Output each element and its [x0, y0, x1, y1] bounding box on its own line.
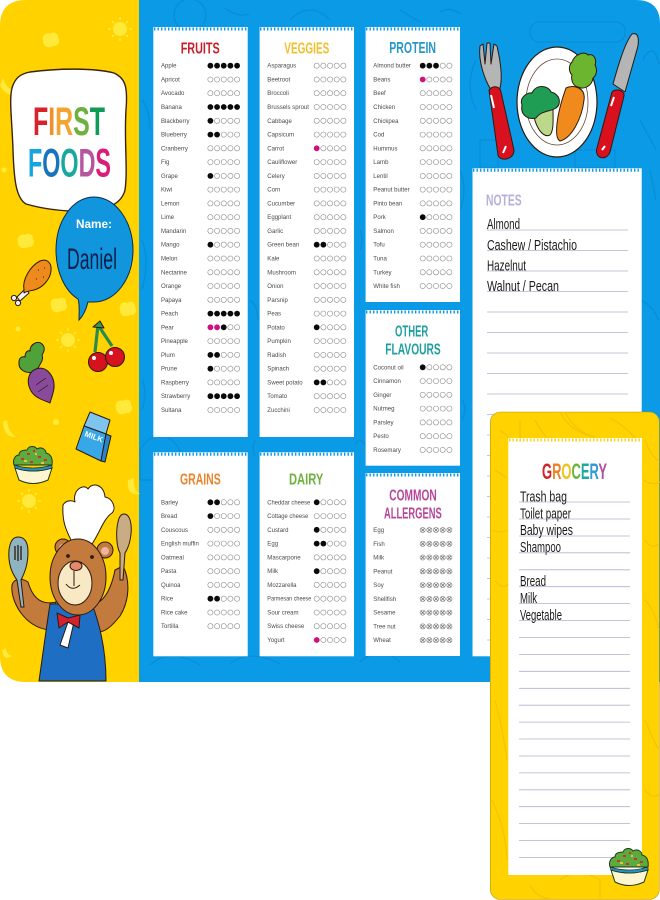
- list: grains: Tortilla: [161, 624, 179, 630]
- list: veggies: Zucchini: [267, 408, 290, 414]
- heading: common allergens: ALLERGENS: [384, 505, 442, 522]
- list: fruits: Fig: [161, 160, 169, 166]
- illustration: chef bear: [9, 485, 131, 681]
- list: protein: Pork: [373, 215, 387, 221]
- list: fruits: Blueberry: [161, 133, 188, 139]
- heading: fruits: FRUITS: [181, 40, 220, 57]
- list: veggies: Cauliflower: [267, 160, 297, 166]
- list: fruits: Mandarin: [161, 229, 186, 235]
- panel: grocery pad: [490, 412, 660, 900]
- panel: common allergens card: [366, 473, 460, 656]
- list: fruits: Cranberry: [161, 146, 189, 152]
- list: protein: Salmon: [373, 229, 394, 235]
- list: veggies: Celery: [267, 174, 286, 180]
- list: protein: Lamb: [373, 160, 389, 166]
- list: veggies: Carrot: [267, 146, 284, 152]
- bear head: [50, 539, 106, 615]
- list: fruits: Apple: [161, 64, 177, 70]
- list: fruits: Apricot: [161, 77, 180, 83]
- grocery handwriting: Baby wipes: [520, 522, 573, 539]
- heading: dairy: DAIRY: [289, 471, 324, 488]
- list: veggies: Onion: [267, 284, 283, 290]
- panel: grains card: [153, 452, 248, 656]
- list: protein: Almond butter: [373, 64, 411, 70]
- list: common allergens: Wheat: [373, 638, 391, 644]
- list: fruits: Pear: [161, 325, 174, 331]
- list: veggies: [267, 63, 346, 414]
- notes handwriting: Walnut / Pecan: [487, 278, 559, 295]
- list: veggies: Capsicum: [267, 133, 294, 139]
- list: dairy: Parmesan cheese: [267, 597, 312, 603]
- list: grains: Rice cake: [161, 610, 188, 616]
- list: veggies: Asparagus: [267, 64, 296, 70]
- illustration: knife: [597, 34, 638, 158]
- list: fruits: Grape: [161, 174, 178, 180]
- list: other flavours: Coconut oil: [373, 365, 404, 371]
- panel: yellow sidebar: [0, 0, 139, 682]
- list: grains: Rice: [161, 597, 174, 603]
- panel: notes sheet: [472, 168, 642, 656]
- list: protein: Peanut butter: [373, 188, 410, 194]
- list: other flavours: Nutmeg: [373, 407, 394, 413]
- list: fruits: Peach: [161, 312, 178, 318]
- list: protein: Turkey: [373, 270, 393, 276]
- list: veggies: Corn: [267, 188, 280, 194]
- list: common allergens: Shellfish: [373, 597, 396, 603]
- list: grains: Oatmeal: [161, 555, 184, 561]
- grocery handwriting: Trash bag: [520, 489, 567, 506]
- notes handwriting: Almond: [487, 216, 520, 233]
- list: fruits: Blackberry: [161, 119, 191, 125]
- chef hat: [63, 485, 114, 544]
- list: other flavours: [373, 364, 452, 454]
- notes handwriting: Hazelnut: [487, 258, 527, 274]
- heading: other flavours: OTHER: [395, 324, 429, 341]
- title: first: FIRST: [33, 100, 105, 144]
- list: fruits: Kiwi: [161, 188, 172, 194]
- icon: chicken drumstick: [11, 260, 51, 306]
- list: common allergens: Egg: [373, 528, 384, 534]
- title: foods: FOODS: [28, 142, 111, 186]
- list: dairy: Egg: [267, 542, 278, 548]
- list: grains: Pasta: [161, 569, 177, 575]
- list: fruits: Papaya: [161, 298, 182, 304]
- list: dairy: Sour cream: [267, 610, 299, 616]
- list: grains: Couscous: [161, 528, 188, 534]
- list: veggies: Radish: [267, 353, 286, 359]
- notes handwriting: [487, 216, 577, 295]
- list: fruits: Plum: [161, 353, 175, 359]
- panel: other flavours card: [366, 310, 460, 466]
- list: fruits: Orange: [161, 284, 182, 290]
- list: fruits: Mango: [161, 243, 180, 249]
- grocery handwriting: Toilet paper: [520, 505, 571, 522]
- list: common allergens: Sesame: [373, 611, 396, 617]
- icon: milk carton: [76, 412, 111, 462]
- list: dairy: Cottage cheese: [267, 514, 309, 520]
- list: veggies: Pumpkin: [267, 339, 291, 345]
- list: grains: Bread: [161, 514, 177, 520]
- grocery handwriting: Bread: [520, 573, 546, 590]
- list: protein: Beans: [373, 77, 390, 83]
- sidebar decorations: [0, 17, 140, 658]
- list: protein: [373, 63, 452, 290]
- list: protein: Tofu: [373, 243, 385, 249]
- grocery handwriting: Vegetable: [520, 607, 562, 624]
- bear arms: [12, 579, 56, 630]
- list: veggies: Beetroot: [267, 77, 290, 83]
- heading: grocery: GROCERY: [542, 459, 607, 484]
- list: fruits: Nectarine: [161, 270, 188, 276]
- list: protein: Cod: [373, 133, 384, 139]
- list: veggies: Sweet potato: [267, 380, 303, 386]
- list: veggies: Broccoli: [267, 91, 289, 97]
- list: common allergens: Fish: [373, 542, 385, 548]
- panel: blue board background: [139, 0, 660, 682]
- list: protein: Chickpea: [373, 119, 399, 125]
- name value: Daniel: [67, 243, 117, 276]
- list: dairy: Swiss cheese: [267, 624, 305, 630]
- list: protein: White fish: [373, 284, 400, 290]
- name label: Name:: [76, 217, 112, 231]
- list: fruits: Strawberry: [161, 394, 191, 400]
- list: common allergens: Milk: [373, 556, 385, 562]
- list: other flavours: Ginger: [373, 393, 391, 399]
- list: fruits: Pineapple: [161, 339, 189, 345]
- heading: common allergens: COMMON: [389, 487, 437, 504]
- name speech bubble: [56, 197, 133, 320]
- list: dairy: Mascarpone: [267, 555, 301, 561]
- list: fruits: Banana: [161, 105, 182, 111]
- list: fruits: Prune: [161, 367, 178, 373]
- list: veggies: Parsnip: [267, 298, 288, 304]
- list: dairy: Mozzarella: [267, 583, 297, 589]
- list: fruits: Melon: [161, 256, 177, 262]
- list: fruits: Lime: [161, 215, 175, 221]
- panel: fruits card: [153, 27, 248, 437]
- list: protein: Lentil: [373, 174, 388, 180]
- list: veggies: Garlic: [267, 229, 283, 235]
- heading: notes: NOTES: [486, 193, 522, 210]
- grocery handwriting: [520, 489, 573, 624]
- list: fruits: Raspberry: [161, 380, 190, 386]
- icon: salad bowl: [13, 446, 52, 484]
- heading: common allergens: [384, 487, 442, 522]
- list: veggies: Kale: [267, 256, 280, 262]
- list: veggies: Peas: [267, 312, 281, 318]
- list: dairy: [267, 499, 346, 644]
- title bubble: [11, 69, 127, 211]
- list: other flavours: Pesto: [373, 434, 389, 440]
- spatula: [9, 537, 28, 607]
- list: veggies: Tomato: [267, 394, 288, 400]
- icon: cherries: [88, 321, 124, 372]
- icon: milk carton: MILK: [83, 429, 104, 444]
- panel: dairy card: [260, 452, 354, 656]
- list: fruits: Lemon: [161, 201, 180, 207]
- icon: grocery salad bowl: [609, 848, 648, 886]
- list: dairy: Custard: [267, 528, 288, 534]
- list: dairy: Milk: [267, 569, 279, 575]
- list: veggies: Potato: [267, 325, 285, 331]
- list: protein: Beef: [373, 91, 386, 97]
- heading: other flavours: FLAVOURS: [385, 341, 441, 358]
- bow and shirt: [60, 618, 74, 648]
- list: grains: English muffin: [161, 542, 199, 548]
- list: protein: Chicken: [373, 105, 395, 111]
- heading: other flavours: [385, 324, 441, 358]
- list: grains: Quinoa: [161, 583, 181, 589]
- grocery handwriting: Milk: [520, 590, 537, 607]
- list: common allergens: [373, 527, 452, 644]
- list: fruits: [161, 63, 240, 414]
- list: protein: Pinto bean: [373, 201, 402, 207]
- list: grains: Barley: [161, 500, 179, 506]
- illustration: plate of vegetables: [517, 47, 597, 157]
- list: veggies: Brussels sprout: [267, 105, 309, 111]
- heading: veggies: VEGGIES: [284, 40, 330, 57]
- icon: beetroot: [19, 342, 54, 403]
- list: other flavours: Cinnamon: [373, 379, 401, 385]
- list: grains: [161, 499, 240, 630]
- list: veggies: Cabbage: [267, 119, 292, 125]
- heading: grains: GRAINS: [180, 471, 221, 488]
- list: veggies: Cucumber: [267, 201, 295, 207]
- list: common allergens: Tree nut: [373, 624, 396, 630]
- grocery handwriting: Shampoo: [520, 539, 561, 556]
- list: other flavours: Rosemary: [373, 448, 402, 454]
- list: veggies: Green bean: [267, 243, 299, 249]
- panel: veggies card: [260, 27, 354, 437]
- list: dairy: Yogurt: [267, 638, 285, 644]
- illustration: fork: [480, 43, 514, 159]
- list: veggies: Eggplant: [267, 215, 291, 221]
- list: veggies: Mushroom: [267, 270, 296, 276]
- panel: protein card: [366, 27, 460, 302]
- list: protein: Hummus: [373, 146, 398, 152]
- list: veggies: Spinach: [267, 367, 289, 373]
- list: dairy: Cheddar cheese: [267, 500, 311, 506]
- list: other flavours: Parsley: [373, 420, 394, 426]
- bear apron body: [39, 604, 106, 681]
- list: fruits: Avocado: [161, 91, 185, 97]
- list: protein: Tuna: [373, 256, 387, 262]
- list: fruits: Sultana: [161, 408, 182, 414]
- notes handwriting: Cashew / Pistachio: [487, 237, 577, 254]
- heading: protein: PROTEIN: [389, 40, 436, 57]
- list: common allergens: Peanut: [373, 569, 393, 575]
- list: common allergens: Soy: [373, 583, 385, 589]
- wooden spoon: [117, 514, 131, 580]
- bear ears: [55, 539, 71, 555]
